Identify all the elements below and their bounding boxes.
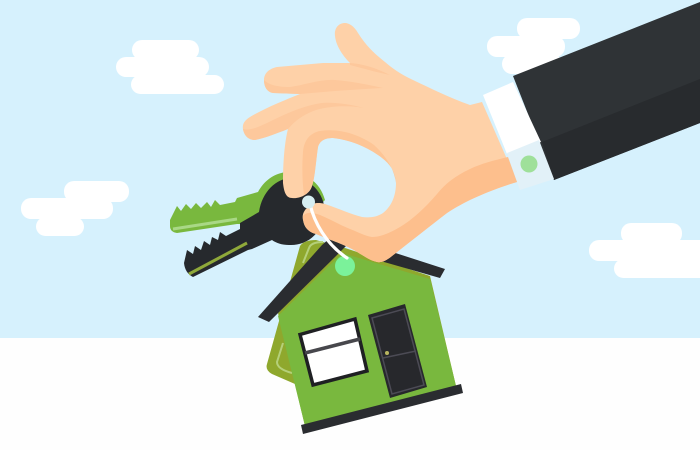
tag bead xyxy=(335,256,355,276)
hand xyxy=(243,23,517,262)
sky background xyxy=(0,0,700,338)
cloud: top right xyxy=(487,18,580,74)
cloud: top left xyxy=(116,40,224,94)
cloud: left xyxy=(21,181,129,236)
cloud: right xyxy=(589,223,700,278)
green key xyxy=(170,172,325,233)
hand shadow: palm and thumb xyxy=(303,157,517,262)
roof xyxy=(258,238,445,322)
window xyxy=(300,319,367,385)
black key xyxy=(184,178,325,277)
hand shadow: middle finger xyxy=(264,80,383,94)
ground xyxy=(0,338,700,450)
hand crease: little finger xyxy=(350,63,390,75)
shirt cuff xyxy=(483,82,554,190)
key ring xyxy=(302,196,347,258)
house base xyxy=(301,384,463,434)
house body xyxy=(278,247,456,426)
sleeve xyxy=(513,2,700,180)
hand shadow: ring finger xyxy=(243,103,364,140)
hand shadow: inner index finger xyxy=(302,130,396,195)
house tag back xyxy=(267,240,350,390)
door xyxy=(368,304,427,398)
